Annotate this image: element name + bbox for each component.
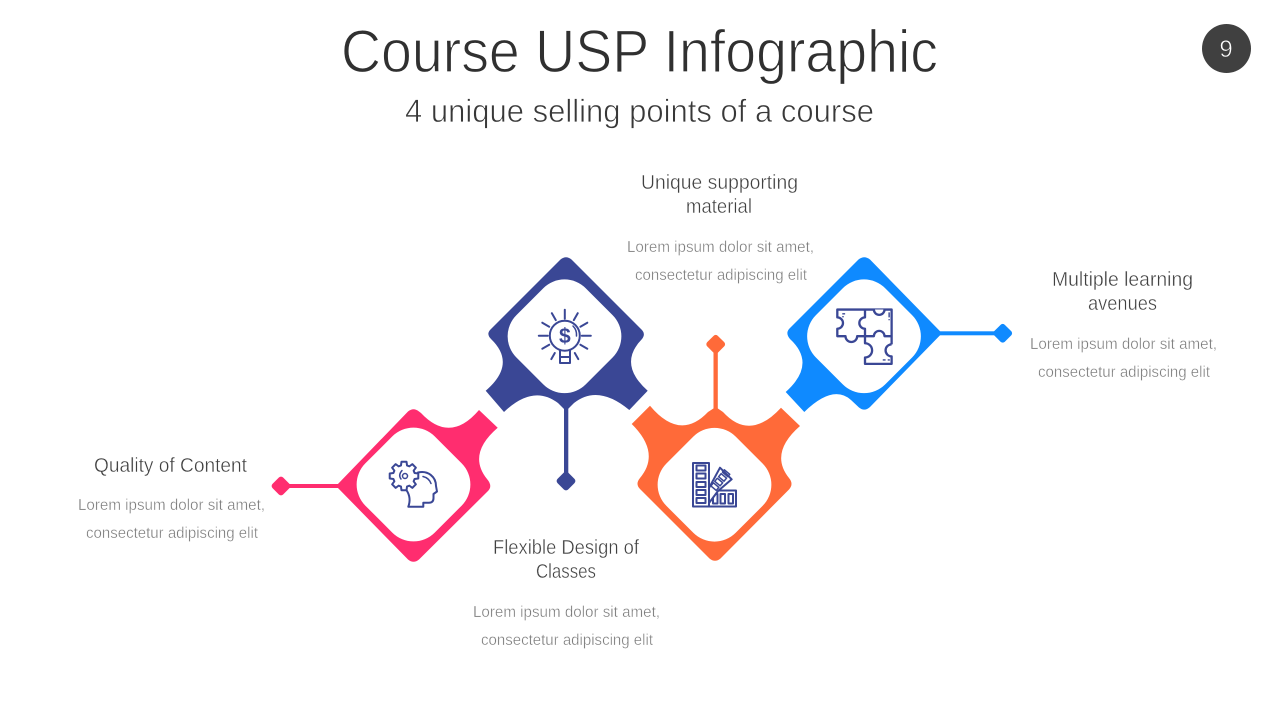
- icon: head with gear: [390, 462, 437, 507]
- panel: multiple learning avenues: [786, 257, 1217, 412]
- panel: quality of content: [78, 409, 498, 562]
- page number badge: [1202, 24, 1251, 73]
- orange connector and end diamond: [705, 334, 726, 412]
- page number badge: 9: [1219, 36, 1233, 63]
- icon: light bulb with dollar: $: [559, 325, 571, 348]
- blue frame: [786, 257, 942, 412]
- text: quality of content: consectetur adipiscing elit: [86, 525, 259, 542]
- text: flexible design of classes: consectetur adipiscing elit: [481, 632, 654, 649]
- text: unique supporting material: Unique supporting: [641, 172, 798, 194]
- icon: colour swatches: [693, 463, 736, 506]
- text: quality of content: [78, 455, 265, 542]
- panel: unique supporting material: [627, 172, 814, 561]
- text: unique supporting material: material: [686, 196, 752, 218]
- text: quality of content: Quality of Content: [94, 455, 247, 477]
- text: multiple learning avenues: consectetur adipiscing elit: [1038, 364, 1211, 381]
- navy connector and end diamond: [555, 405, 577, 492]
- orange frame: [632, 406, 800, 561]
- text: multiple learning avenues: [1030, 269, 1217, 381]
- text: unique supporting material: Lorem ipsum dolor sit amet,: [627, 239, 814, 256]
- pink frame: [336, 409, 498, 562]
- text: unique supporting material: [627, 172, 814, 284]
- text: flexible design of classes: Classes: [536, 561, 596, 583]
- text: multiple learning avenues: Multiple learning: [1052, 269, 1193, 291]
- text: multiple learning avenues: Lorem ipsum dolor sit amet,: [1030, 336, 1217, 353]
- icon: puzzle pieces: [837, 310, 892, 364]
- navy frame: [486, 257, 648, 412]
- text: flexible design of classes: [473, 537, 660, 649]
- subtitle: 4 unique selling points of a course: [405, 93, 874, 129]
- pink connector and end diamond: [270, 475, 340, 497]
- text: quality of content: Lorem ipsum dolor sit amet,: [78, 497, 265, 514]
- text: unique supporting material: consectetur adipiscing elit: [635, 267, 808, 284]
- text: multiple learning avenues: avenues: [1088, 293, 1157, 315]
- text: flexible design of classes: Lorem ipsum dolor sit amet,: [473, 604, 660, 621]
- icon: light bulb with dollar: [539, 310, 591, 363]
- title: Course USP Infographic: [341, 18, 938, 85]
- panel: flexible design of classes: [473, 257, 660, 649]
- text: flexible design of classes: Flexible Design of: [493, 537, 639, 559]
- blue connector and end diamond: [936, 323, 1013, 344]
